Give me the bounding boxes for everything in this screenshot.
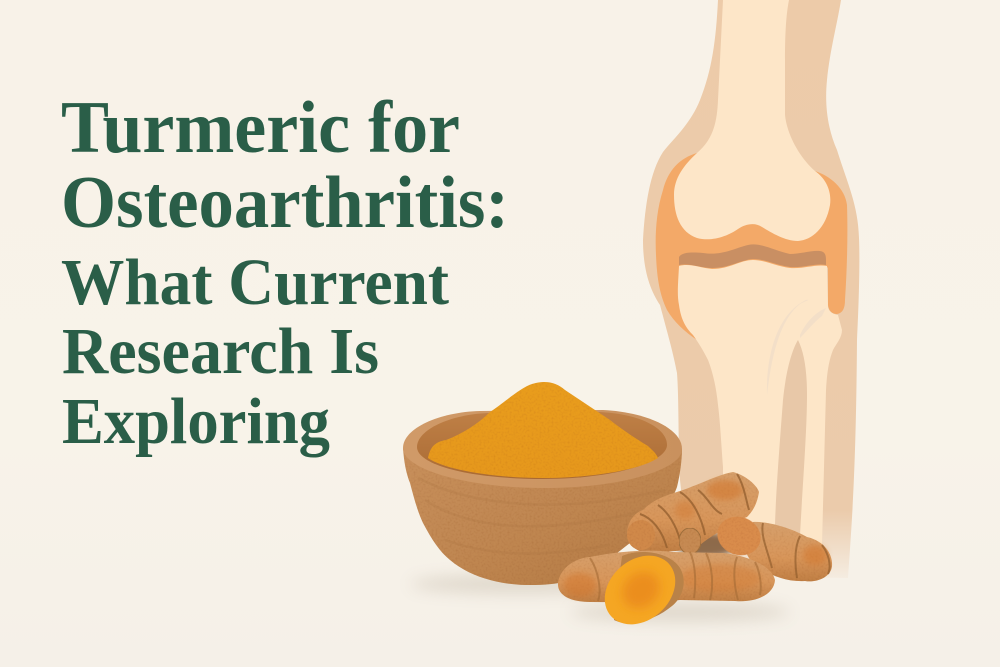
bowl shadow [410,575,630,593]
powder mound [428,382,658,478]
right root knob [712,511,766,561]
title line: Osteoarthritis: Osteoarthritis: [61,162,509,244]
upper root [627,472,759,554]
front root [558,542,775,638]
rhizome shadow [570,603,790,621]
subtitle line: Research Is: Research Is [62,315,379,388]
cut end skin [614,552,684,623]
wooden bowl of turmeric powder [403,382,682,585]
bowl interior [417,412,667,479]
bowl rim [403,410,682,488]
cut face core [615,564,667,616]
bone contour lines [767,300,808,395]
cartilage [656,150,847,340]
femur [674,0,830,241]
meniscus band [679,244,826,268]
turmeric roots [558,472,832,638]
upper root knob [679,528,701,554]
right root [745,522,832,581]
subtitle line: What Current: What Current [61,246,449,319]
bowl body [403,448,682,585]
knee joint illustration [643,0,859,578]
title line: Turmeric for: Turmeric for [61,87,460,169]
tibia and fibula [678,260,842,545]
bowl wood grain [418,478,665,554]
title [61,87,509,458]
soft tissue outline [643,0,859,578]
subtitle line: Exploring: Exploring [62,385,330,458]
gap between tibia and fibula [775,340,807,535]
cut face [591,542,689,638]
shadow between roots [676,533,736,557]
